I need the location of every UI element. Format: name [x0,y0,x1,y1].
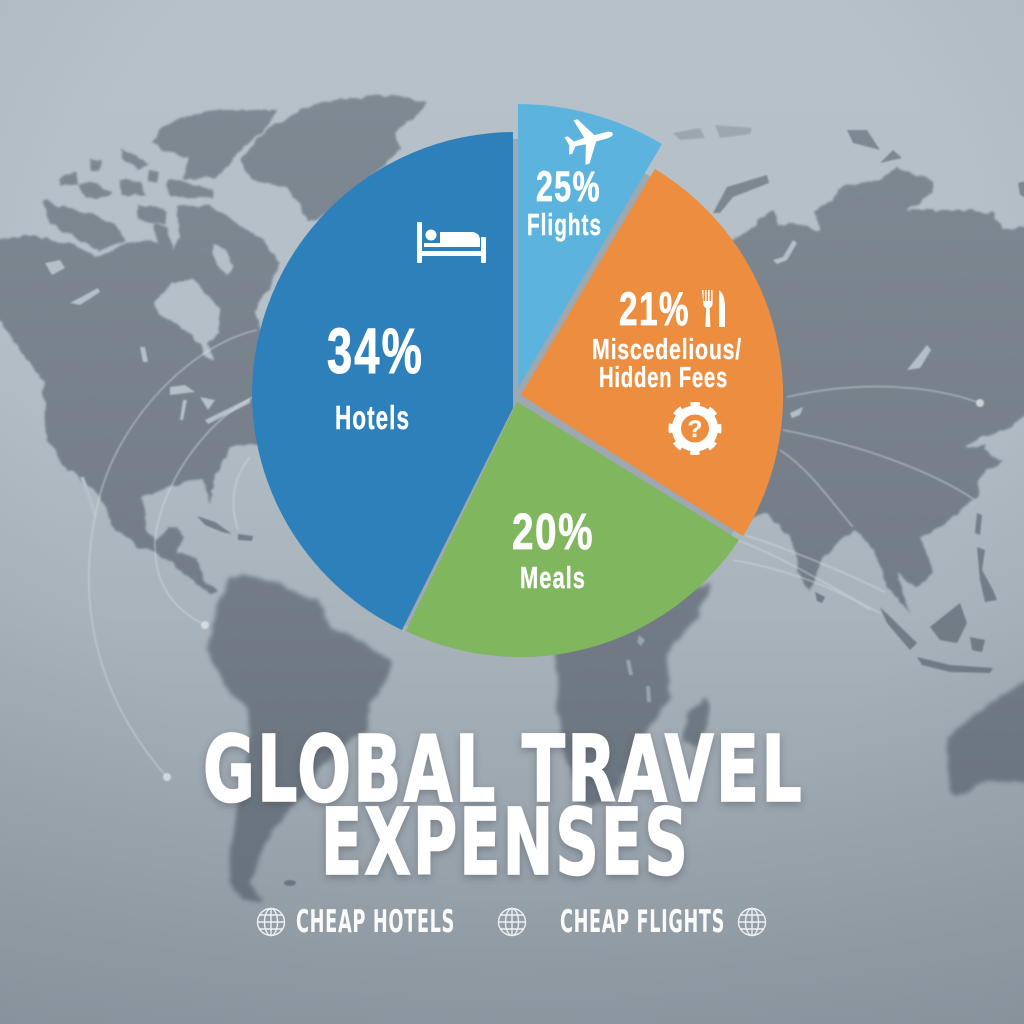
title: EXPENSES [321,789,690,896]
greenland [240,95,425,222]
icon: gear with question mark: ? [688,416,702,443]
water and lakes on the map [45,240,931,702]
eurasia [560,167,1024,613]
title [203,716,804,896]
icon: globe left [258,908,284,936]
footer links [258,904,766,940]
world map [0,95,1024,902]
pie chart [252,104,783,657]
label: hotels 34%: 34% [327,315,424,387]
label: hidden fees: Hidden Fees [599,362,728,394]
australia [947,681,1024,797]
icon: bed [417,222,486,263]
label: hotels: Hotels [335,399,410,436]
label: flights: Flights [527,207,602,242]
icon: globe middle [498,908,526,936]
africa [553,583,710,806]
icon: globe right [738,908,766,936]
route endpoints [163,399,984,781]
label: flights 25%: 25% [536,163,601,211]
pie gap base [261,139,773,651]
icon: gear with question mark [672,405,718,452]
title: GLOBAL TRAVEL [203,716,804,823]
slice: meals [406,402,739,657]
icon: fork and knife [702,290,725,327]
south america [207,573,390,902]
label: miscellaneous: Miscedelious/ [592,334,742,366]
label: meals: Meals [520,560,586,595]
label: cheap hotels: CHEAP HOTELS [296,904,455,940]
north america [0,110,300,593]
slice: hotels [252,132,513,630]
arctic and north islands [713,130,1024,213]
madagascar [683,697,710,750]
label: miscellaneous 21%: 21% [619,282,690,335]
label: meals 20%: 20% [512,503,594,560]
caribbean islands [197,516,253,541]
icon: airplane [561,111,619,168]
southeast asia islands [815,513,997,673]
slice: flights [518,104,662,388]
label: cheap flights: CHEAP FLIGHTS [560,904,725,940]
slice: miscellaneous [521,169,783,536]
flight routes [89,330,980,777]
